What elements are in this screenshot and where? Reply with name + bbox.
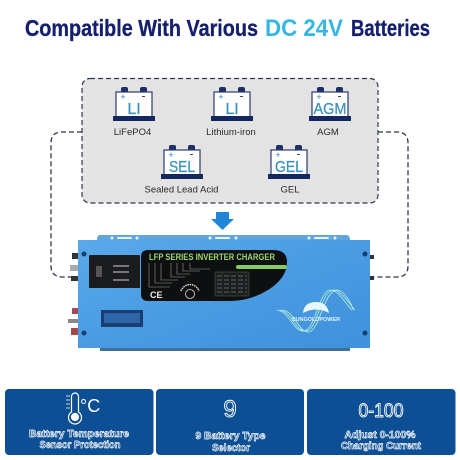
indicator lines (149, 263, 210, 287)
battery: Sealed Lead Acid: Sealed Lead Acid (145, 184, 218, 196)
breaker panel (89, 255, 140, 288)
card: temperature sensor (5, 389, 154, 455)
battery: Lithium-iron: Lithium-iron (206, 127, 256, 138)
card label: Adjust 0-100% (344, 429, 416, 441)
title: Compatible With Various (25, 15, 258, 41)
battery: Sealed Lead Acid (145, 145, 218, 196)
top flange (97, 235, 350, 240)
screws (82, 252, 368, 336)
right terminals (370, 255, 374, 280)
battery: Lithium-iron: LI (225, 101, 239, 118)
arrow: down (211, 212, 234, 230)
battery: AGM (309, 87, 351, 138)
title: DC 24V (265, 15, 343, 42)
left terminals (68, 253, 78, 335)
card label: Battery Temperature (29, 428, 129, 440)
battery: LiFePO4: LI (127, 101, 141, 118)
battery: GEL (268, 145, 310, 196)
card: charging current: Charging Current (341, 440, 421, 452)
title (25, 15, 430, 42)
dashed connector right (372, 132, 408, 277)
black control panel (141, 250, 287, 301)
spec table (215, 272, 249, 296)
card label: 9 Battery Type (196, 430, 266, 442)
panel: battery types (82, 78, 378, 203)
logo: brand: SUNGOLDPOWER (292, 317, 340, 323)
battery: Sealed Lead Acid: SEL (169, 159, 195, 176)
logo: sun (303, 302, 329, 313)
body (78, 240, 370, 348)
CE mark: CE (150, 290, 163, 300)
panel heading: LFP SERIES INVERTER CHARGER (149, 252, 275, 262)
battery: GEL: GEL (280, 184, 300, 196)
inverter (68, 235, 374, 351)
dashed connector left (51, 132, 82, 277)
card: charging current (307, 389, 456, 455)
battery: Lithium-iron (206, 87, 256, 138)
card: battery type selector (156, 389, 304, 455)
icon: degree C: °C (80, 396, 100, 416)
big number: 0-100 (358, 400, 404, 422)
bottom flange (100, 348, 350, 351)
display (101, 310, 143, 327)
logo: sine wave (277, 290, 355, 332)
icon: thermometer (66, 393, 82, 424)
card: temperature sensor: Sensor Protection (40, 439, 120, 451)
battery: AGM: AGM (314, 101, 346, 118)
card: battery type selector: Selector (212, 442, 250, 454)
mounting holes (110, 236, 336, 240)
big number: 9 (223, 396, 237, 423)
green bar (236, 265, 287, 269)
title: Batteries (351, 15, 430, 41)
battery: AGM: AGM (317, 127, 339, 138)
battery: LiFePO4 (113, 87, 155, 138)
dial (181, 285, 199, 298)
battery: GEL: GEL (275, 159, 303, 176)
battery: LiFePO4: LiFePO4 (114, 127, 151, 138)
